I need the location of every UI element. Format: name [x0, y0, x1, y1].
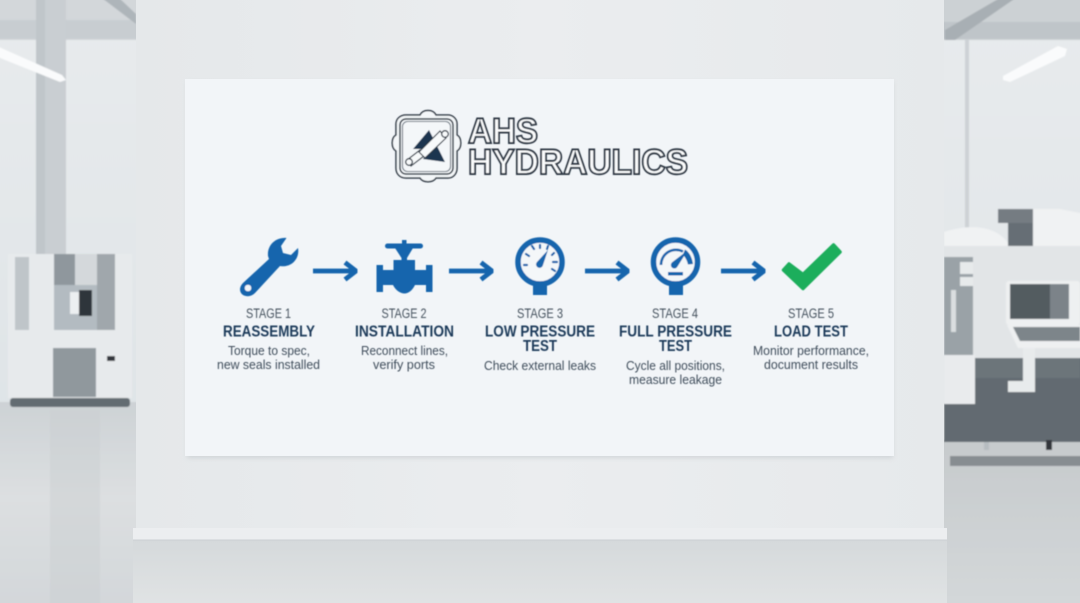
ceiling light right — [1003, 46, 1067, 82]
icon: speedometer gauge — [654, 240, 698, 295]
central wall — [133, 0, 947, 603]
stage 5 text — [753, 306, 869, 372]
stage 1 text: REASSEMBLY — [223, 324, 316, 340]
right machine — [944, 209, 1080, 450]
stage 1: reassembly — [217, 238, 320, 372]
stage 4 text: FULL PRESSURE — [619, 324, 732, 340]
ceiling light left — [0, 43, 66, 82]
stage 2 text: verify ports — [373, 357, 435, 372]
icon: check mark — [784, 245, 840, 288]
icon: pressure gauge — [518, 240, 562, 295]
arrow 1 — [313, 262, 356, 280]
left machine — [8, 254, 132, 407]
stage 3 text: LOW PRESSURE — [485, 324, 595, 340]
stage 1 text: new seals installed — [217, 357, 320, 372]
logo wordmark: HYDRAULICS — [468, 143, 688, 182]
stage 2 text: Reconnect lines, — [361, 343, 448, 358]
stage 4: full pressure test — [619, 240, 732, 387]
stage 4 text: STAGE 4 — [652, 306, 698, 321]
stage 5 text: LOAD TEST — [774, 324, 848, 340]
logo emblem — [392, 110, 461, 182]
stage 5 text: Monitor performance, — [753, 343, 869, 358]
stage 2 text: STAGE 2 — [382, 306, 426, 321]
logo wordmark — [468, 112, 688, 182]
stage 3 text: Check external leaks — [484, 358, 596, 373]
stage 1 text — [217, 306, 320, 372]
icon: valve — [376, 240, 432, 294]
stage 5: load test — [753, 245, 869, 372]
left background: factory hall — [0, 0, 138, 603]
stage 3: low pressure test — [484, 240, 596, 373]
stage 2: installation — [355, 240, 454, 372]
stage 3 text: STAGE 3 — [517, 306, 563, 321]
arrow 2 — [449, 262, 492, 280]
stage 5 text: document results — [764, 357, 858, 372]
stage 5 text: STAGE 5 — [788, 306, 834, 321]
right background: factory hall — [942, 0, 1080, 603]
stage 4 text: TEST — [659, 338, 692, 355]
stage 3 text: TEST — [523, 338, 557, 355]
stage 3 text — [484, 306, 596, 373]
stage 4 text: measure leakage — [629, 372, 722, 387]
wall panel — [185, 79, 894, 456]
arrow 3 — [585, 262, 628, 280]
stage 1 text: Torque to spec, — [228, 343, 310, 358]
icon: wrench — [240, 238, 298, 296]
logo: AHS Hydraulics — [392, 110, 688, 182]
stage 2 text: INSTALLATION — [355, 324, 454, 340]
content — [217, 110, 869, 387]
arrow 4 — [721, 262, 764, 280]
stage 4 text: Cycle all positions, — [626, 358, 725, 373]
stage 1 text: STAGE 1 — [246, 306, 291, 321]
logo wordmark: AHS — [468, 112, 538, 151]
stage 2 text — [355, 306, 454, 372]
stage 4 text — [619, 306, 732, 387]
